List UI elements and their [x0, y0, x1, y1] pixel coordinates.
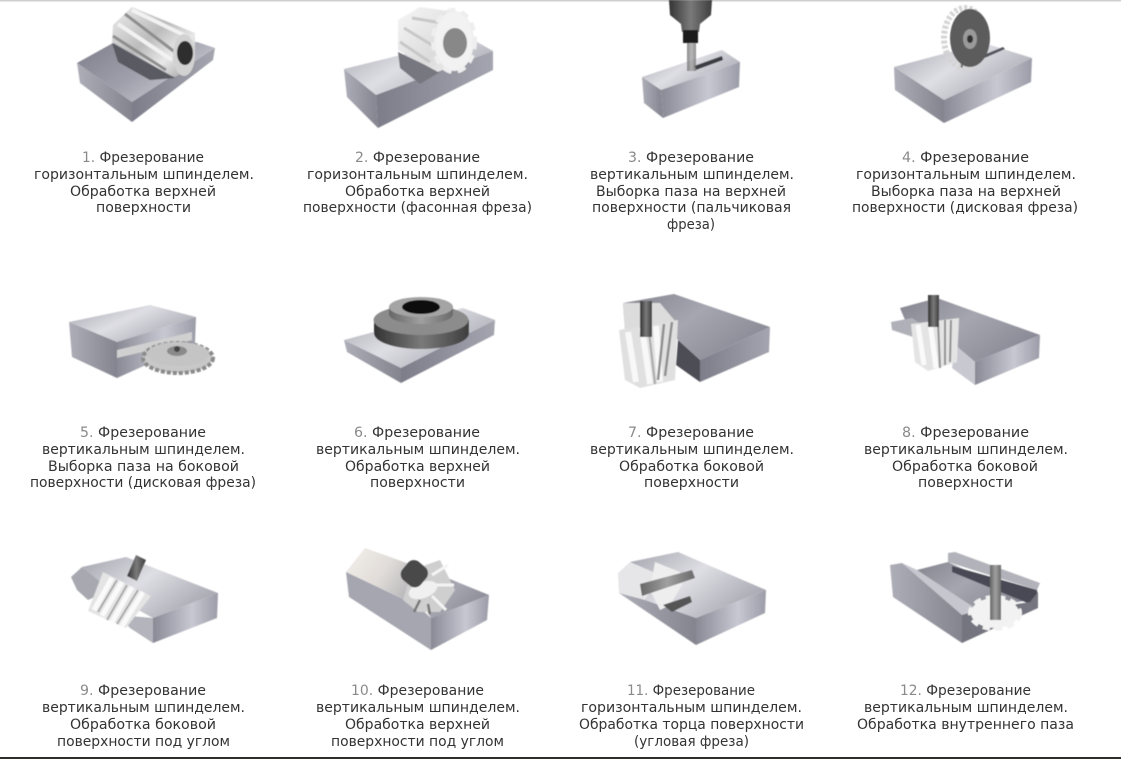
- caption 12: Обработка внутреннего паза: [857, 717, 1074, 733]
- caption 3: Выборка паза на верхней: [596, 184, 786, 200]
- caption 1: поверхности: [96, 200, 191, 216]
- illustration: angled side milling: [71, 555, 218, 643]
- caption 5: 5. Фрезерование: [80, 425, 206, 441]
- caption 9: вертикальным шпинделем.: [42, 700, 245, 716]
- caption 10: 10. Фрезерование: [351, 683, 484, 699]
- caption 11: Обработка торца поверхности: [579, 717, 804, 733]
- caption 8: вертикальным шпинделем.: [864, 442, 1068, 458]
- caption 4: горизонтальным шпинделем.: [856, 167, 1076, 183]
- illustration: end mill and slot: [642, 0, 740, 118]
- caption 11: горизонтальным шпинделем.: [581, 700, 802, 716]
- caption 6: 6. Фрезерование: [354, 425, 480, 441]
- panel: operation 6: [316, 297, 520, 491]
- panel: operation 2: [303, 7, 532, 216]
- panel: operation 5: [30, 305, 256, 491]
- caption 1: Обработка верхней: [70, 184, 216, 200]
- illustration: form cutter on block: [344, 7, 493, 128]
- illustration: disc cutter and slot: [894, 8, 1032, 123]
- caption 7: 7. Фрезерование: [628, 425, 754, 441]
- caption 8: Обработка боковой: [892, 459, 1038, 475]
- caption 12: вертикальным шпинделем.: [864, 700, 1068, 716]
- panel: operation 4: [852, 8, 1078, 216]
- panel: operation 8: [864, 295, 1068, 491]
- illustration: angled top milling: [346, 548, 489, 650]
- caption 5: вертикальным шпинделем.: [42, 442, 245, 458]
- caption 2: Обработка верхней: [345, 184, 490, 200]
- illustration: angle cutter on end face: [618, 552, 766, 645]
- caption 6: вертикальным шпинделем.: [316, 442, 520, 458]
- top divider line: [0, 0, 1121, 2]
- caption 12: [857, 683, 1074, 733]
- caption 2: [303, 150, 532, 216]
- caption 1: 1. Фрезерование: [82, 150, 204, 166]
- caption 2: 2. Фрезерование: [355, 150, 480, 166]
- caption 9: [42, 683, 245, 750]
- panel: operation 7: [590, 294, 794, 491]
- panel: operation 11: [579, 552, 804, 750]
- caption 3: вертикальным шпинделем.: [590, 167, 794, 183]
- caption 9: Обработка боковой: [70, 717, 216, 733]
- illustration: face mill on plate: [344, 297, 495, 383]
- caption 7: Обработка боковой: [619, 459, 764, 475]
- caption 10: [316, 683, 520, 750]
- caption 6: Обработка верхней: [345, 459, 490, 475]
- panel: operation 3: [590, 0, 794, 233]
- caption 6: поверхности: [370, 475, 465, 491]
- illustration: side slot disc cutter: [69, 305, 213, 378]
- caption 4: 4. Фрезерование: [902, 150, 1029, 166]
- bottom divider line: [0, 757, 1121, 759]
- caption 8: поверхности: [918, 475, 1013, 491]
- illustration: T-slot milling: [890, 552, 1040, 643]
- caption 1: горизонтальным шпинделем.: [34, 167, 254, 183]
- caption 11: (угловая фреза): [634, 734, 749, 750]
- caption 10: вертикальным шпинделем.: [316, 700, 520, 716]
- caption 2: поверхности (фасонная фреза): [303, 200, 532, 216]
- caption 7: поверхности: [644, 475, 739, 491]
- caption 5: поверхности (дисковая фреза): [30, 475, 256, 491]
- caption 1: [34, 150, 254, 216]
- illustration: side milling with ledge: [891, 295, 1040, 385]
- caption 12: 12. Фрезерование: [900, 683, 1031, 699]
- caption 9: 9. Фрезерование: [80, 683, 206, 699]
- caption 5: Выборка паза на боковой: [48, 459, 239, 475]
- caption 2: горизонтальным шпинделем.: [307, 167, 528, 183]
- panel: operation 1: [34, 7, 254, 216]
- panel: operation 9: [42, 555, 245, 750]
- panel: operation 12: [857, 552, 1074, 733]
- illustration: helical cutter on block: [77, 7, 215, 122]
- caption 4: Выборка паза на верхней: [871, 184, 1061, 200]
- caption 10: поверхности под углом: [331, 734, 504, 750]
- caption 4: [852, 150, 1078, 216]
- caption 6: [316, 425, 520, 491]
- panel: operation 10: [316, 548, 520, 750]
- illustration: side milling block: [619, 294, 770, 388]
- caption 3: 3. Фрезерование: [628, 150, 754, 166]
- caption 9: поверхности под углом: [57, 734, 230, 750]
- caption 7: вертикальным шпинделем.: [590, 442, 794, 458]
- caption 8: [864, 425, 1068, 491]
- caption 7: [590, 425, 794, 491]
- caption 3: [590, 150, 794, 233]
- caption 8: 8. Фрезерование: [902, 425, 1029, 441]
- caption 4: поверхности (дисковая фреза): [852, 200, 1078, 216]
- caption 3: поверхности (пальчиковая: [592, 200, 791, 216]
- caption 5: [30, 425, 256, 491]
- caption 3: фреза): [667, 217, 715, 233]
- caption 11: [579, 683, 804, 750]
- caption 11: 11. Фрезерование: [627, 683, 755, 699]
- caption 10: Обработка верхней: [345, 717, 490, 733]
